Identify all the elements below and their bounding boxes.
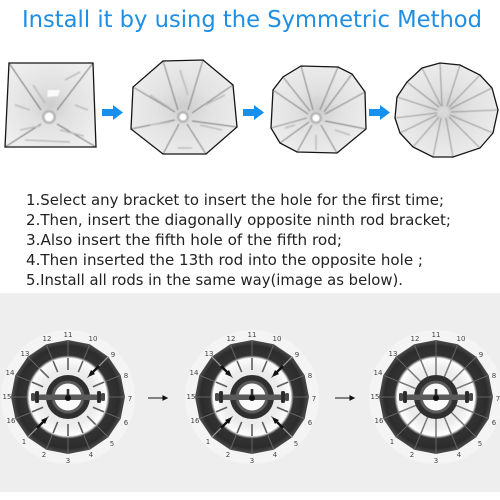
arrow: black 2 [335, 396, 354, 400]
diagram: step two: 7 [312, 395, 316, 403]
instructions text: 1.Select any bracket to insert the hole for the first time; [26, 191, 444, 209]
arrow: blue 2 [243, 105, 264, 120]
diagram: step three: 16 [375, 417, 384, 425]
arrow: blue 1 [102, 105, 123, 120]
diagram: step three: 2 [410, 451, 414, 459]
diagram: step three: 4 [457, 451, 462, 459]
diagram: step one: 4 [89, 451, 94, 459]
diagram: step one: 15 [3, 393, 11, 401]
diagram: step two [185, 330, 319, 465]
diagram: step three: 12 [411, 335, 419, 343]
diagram: step three: 9 [479, 351, 483, 359]
diagram: step one: 8 [124, 372, 128, 380]
photo: octagon softbox [131, 60, 237, 154]
diagram: step one: 6 [124, 419, 129, 427]
instructions text: 4.Then inserted the 13th rod into the opposite hole ; [26, 251, 423, 269]
diagram: step one: 14 [6, 369, 15, 377]
instructions text [26, 191, 451, 289]
diagram: step one: 12 [43, 335, 51, 343]
diagram: step two: 12 [227, 335, 235, 343]
photo: square softbox [5, 63, 96, 147]
photo: sixteen-rod softbox [395, 63, 498, 157]
diagram: step two: 10 [273, 335, 281, 343]
diagram: step one: 11 [64, 331, 72, 339]
diagram: step two: 15 [187, 393, 195, 401]
diagram: step three: 10 [457, 335, 465, 343]
instructions text: 2.Then, insert the diagonally opposite ninth rod bracket; [26, 211, 451, 229]
diagram: step one: 5 [110, 440, 114, 448]
diagram: step two: 11 [248, 331, 256, 339]
diagram: step one: 10 [89, 335, 97, 343]
diagram: step one: 9 [111, 351, 115, 359]
diagram: step two: 8 [308, 372, 312, 380]
instructions text: 3.Also insert the fifth hole of the fifth rod; [26, 231, 342, 249]
diagram: step three [369, 330, 500, 465]
arrow: blue 3 [369, 105, 390, 120]
diagram: step three: 15 [371, 393, 379, 401]
title: Install it by using the Symmetric Method [22, 5, 482, 33]
photo: twelve-rod softbox [271, 66, 366, 153]
diagram: step three: 6 [492, 419, 497, 427]
diagram: step one: 3 [66, 457, 70, 465]
diagram: step one: 13 [21, 350, 29, 358]
diagram: step three: 14 [374, 369, 383, 377]
diagram: step one: 2 [42, 451, 46, 459]
diagram: step three: 5 [478, 440, 482, 448]
instructions text: 5.Install all rods in the same way(image as below). [26, 271, 403, 289]
diagram: step two: 5 [294, 440, 298, 448]
diagram: step two: 9 [295, 351, 299, 359]
diagram: step three: 8 [492, 372, 496, 380]
diagram: step one: 1 [22, 438, 26, 446]
diagram: step two: 2 [226, 451, 230, 459]
arrow: black 1 [148, 396, 167, 400]
diagram: step two: 4 [273, 451, 278, 459]
diagram: step two: 16 [191, 417, 200, 425]
diagram: step one [1, 330, 135, 465]
diagram: step three: 13 [389, 350, 397, 358]
diagram: step two: 6 [308, 419, 313, 427]
diagram: step three: 1 [390, 438, 394, 446]
diagram: step two: 3 [250, 457, 254, 465]
diagram: step three: 3 [434, 457, 438, 465]
diagram: step three: 11 [432, 331, 440, 339]
diagram: step two: 1 [206, 438, 210, 446]
diagram: step one: 16 [7, 417, 16, 425]
diagram: step two: 13 [205, 350, 213, 358]
panel: rod diagrams [0, 293, 500, 492]
diagram: step two: 14 [190, 369, 199, 377]
diagram: step one: 7 [128, 395, 132, 403]
